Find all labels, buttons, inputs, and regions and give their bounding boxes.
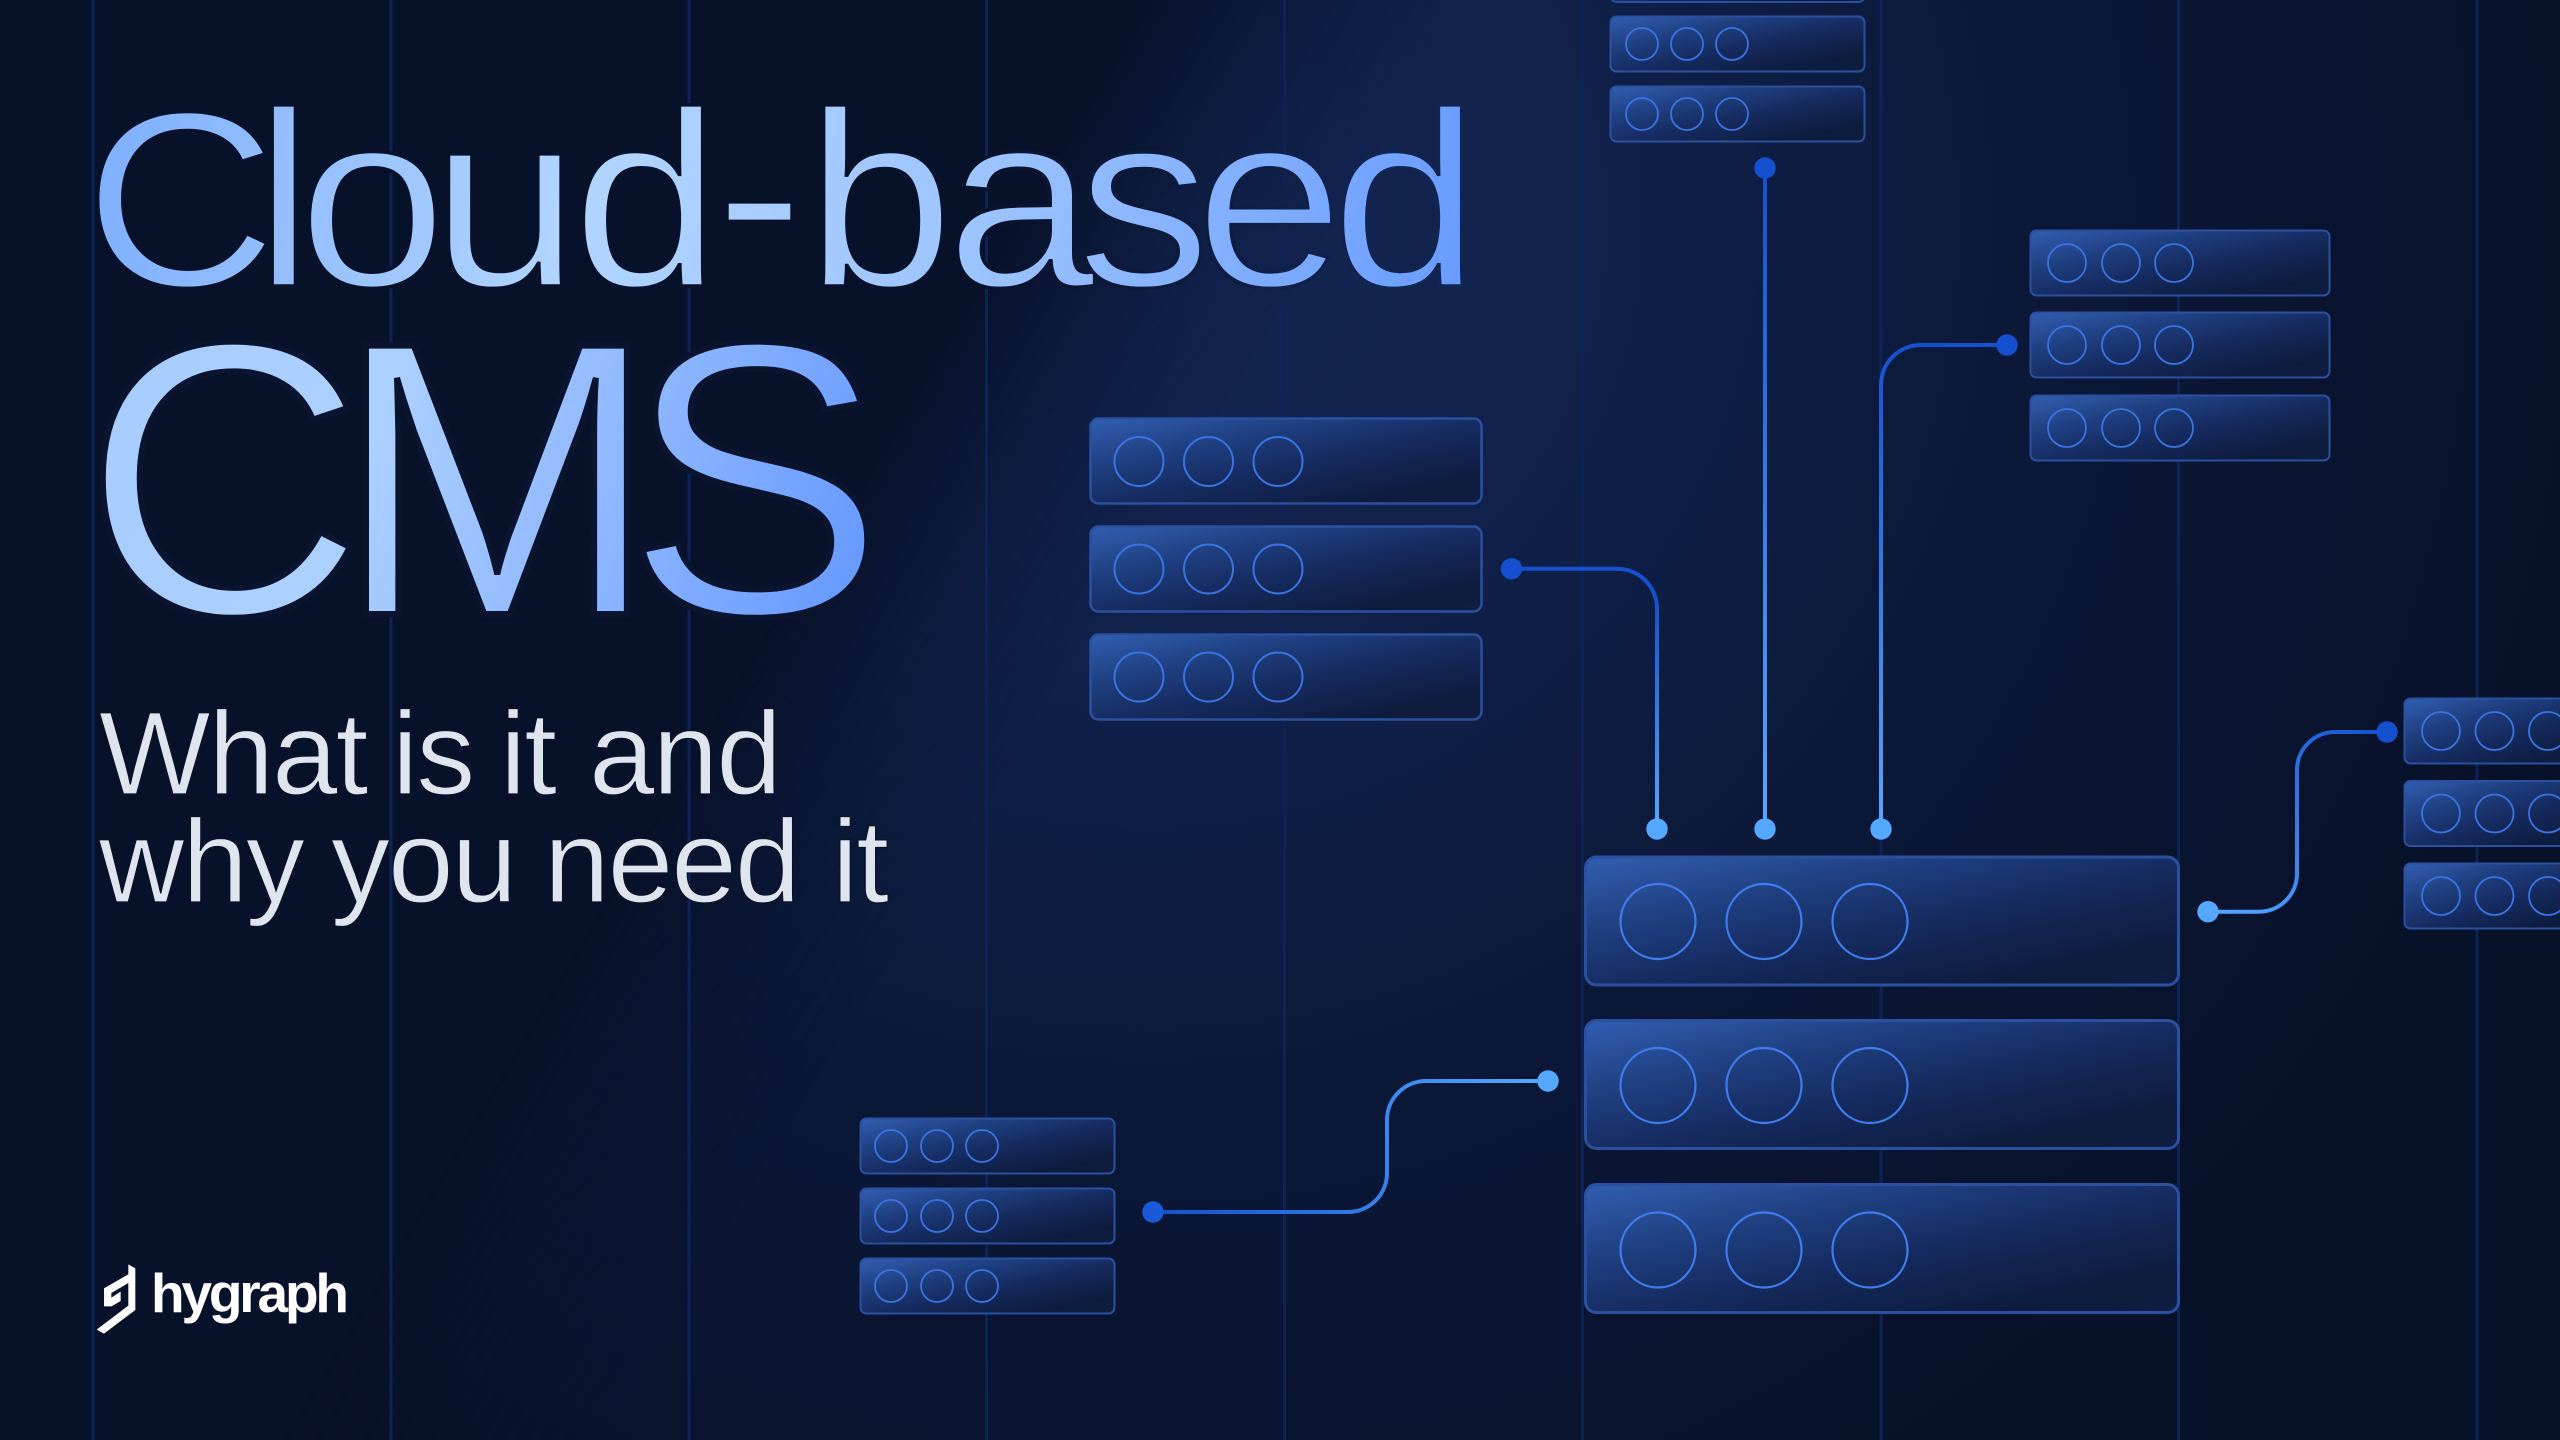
title line 1: Cloud-based: Cloud <box>84 60 721 339</box>
panel group: top <box>1610 0 1864 142</box>
subtitle: is <box>392 688 473 820</box>
background <box>690 0 2267 1336</box>
subtitle: need <box>544 796 799 928</box>
subtitle: What <box>99 688 368 820</box>
icon: hygraph mark <box>97 1264 135 1334</box>
subtitle: why <box>98 796 305 928</box>
panel group: middle left <box>1090 418 1482 720</box>
panel group: bottom left <box>860 1118 1114 1314</box>
connector: bottom left to main <box>1142 1070 1559 1223</box>
panel group: top right <box>2030 230 2330 460</box>
title line 1: Cloud-based: - <box>715 52 804 331</box>
connector: middle left to main <box>1501 558 1668 840</box>
logo wordmark: hygraph <box>151 1262 349 1324</box>
subtitle: it <box>832 796 888 928</box>
subtitle: you <box>331 796 515 928</box>
title line 2: CMS: CMS <box>83 261 885 697</box>
subtitle <box>98 688 888 928</box>
panel group: main central <box>1586 857 2178 1312</box>
connector: top to main <box>1754 157 1776 840</box>
logo: hygraph <box>97 1262 349 1334</box>
subtitle: and <box>589 688 780 820</box>
subtitle: it <box>500 688 556 820</box>
title line 1: Cloud-based: based <box>805 60 1480 339</box>
connector: top right to main <box>1870 334 2018 840</box>
connector: main to far right <box>2197 721 2398 922</box>
panel group: far right <box>2404 698 2560 928</box>
